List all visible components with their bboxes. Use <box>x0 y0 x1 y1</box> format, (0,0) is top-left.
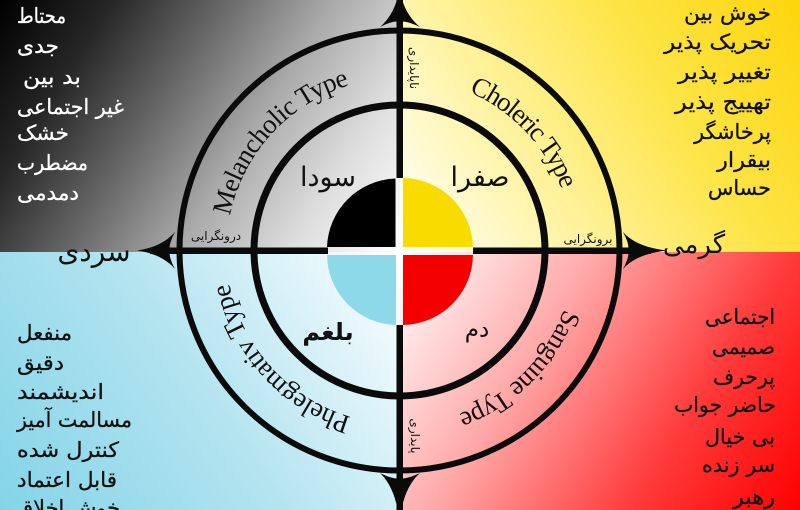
trait list: sanguine: پرحرف <box>713 365 775 389</box>
trait list: phlegmatic: مسالمت آمیز <box>16 407 132 432</box>
curved label: Choleric Type: Choleric Type <box>472 79 572 188</box>
curved label: Melancholic Type: Melancholic Type <box>212 74 348 216</box>
trait list: sanguine: اجتماعی <box>705 305 775 329</box>
axis label: stability: پایداری <box>407 418 422 454</box>
trait list: sanguine: سر زنده <box>702 453 775 477</box>
humour label: sauda: سودا <box>300 162 356 193</box>
trait list: sanguine: بی خیال <box>705 425 775 449</box>
trait list: melancholic: مضطرب <box>17 151 88 175</box>
panel: phlegmatic background <box>0 252 400 510</box>
axes with four arrows <box>137 0 667 510</box>
trait list: sanguine: رهبر <box>732 485 775 509</box>
trait list: phlegmatic <box>16 321 132 510</box>
central humour circle <box>327 178 473 325</box>
panel: choleric background <box>400 0 800 252</box>
axis label: cold: سردی <box>57 235 131 268</box>
axis label: instability: ناپایداری <box>406 47 421 89</box>
trait list: choleric: خوش بین <box>684 1 771 25</box>
trait list: phlegmatic: قابل اعتماد <box>17 468 117 492</box>
trait list: melancholic: غیر اجتماعی <box>17 95 124 119</box>
trait list: melancholic: محتاط <box>17 4 66 28</box>
humour label: safra: صفرا <box>451 162 509 193</box>
trait list: choleric <box>663 1 771 200</box>
axis label: introversion: درونگرایی <box>191 229 241 244</box>
trait list: melancholic: خشک <box>17 121 69 145</box>
humour label: dam: دم <box>465 317 489 343</box>
axis label: hot: گرمی <box>663 229 726 260</box>
trait list: choleric: حساس <box>708 176 771 200</box>
trait list: choleric: پرخاشگر <box>693 120 771 144</box>
trait list: sanguine <box>674 305 776 509</box>
trait list: melancholic: دمدمی <box>17 181 79 205</box>
trait list: sanguine: صمیمی <box>712 335 775 359</box>
trait list: phlegmatic: منفعل <box>17 321 72 345</box>
panel: melancholic background <box>0 0 400 252</box>
trait list: sanguine: حاضر جواب <box>674 393 776 417</box>
trait list: phlegmatic: کنترل شده <box>17 438 119 462</box>
trait list: choleric: تغییر پذیر <box>677 60 771 84</box>
trait list: choleric: تحریک پذیر <box>663 30 771 54</box>
panel: sanguine background <box>400 252 800 510</box>
trait list: phlegmatic: دقیق <box>17 351 64 375</box>
curved label: Sanguine Type: Sanguine Type <box>460 311 579 424</box>
inner ring <box>254 105 545 396</box>
trait list: choleric: تهییج پذیر <box>674 90 771 114</box>
trait list: phlegmatic: اندیشمند <box>17 380 104 404</box>
trait list: choleric: بیقرار <box>716 148 771 172</box>
trait list: melancholic <box>17 4 124 205</box>
trait list: melancholic: جدی <box>17 34 59 58</box>
trait list: melancholic: بد بین <box>23 65 81 89</box>
humour label: balgham: بلغم <box>302 318 354 346</box>
curved label: Phelegmativ Type: Phelegmativ Type <box>218 285 350 434</box>
outer ring <box>180 30 620 470</box>
axis label: extraversion: برونگرایی <box>563 232 613 247</box>
